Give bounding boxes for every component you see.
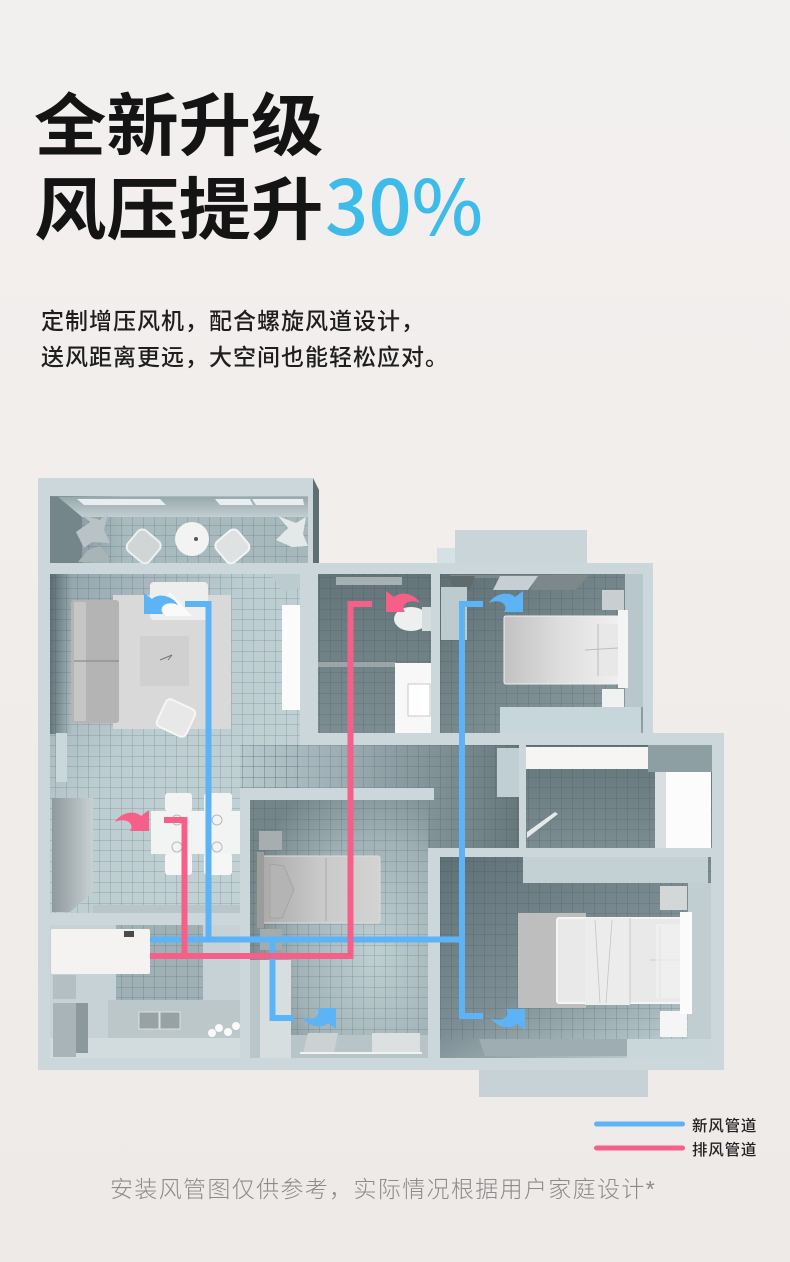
tv unit: [282, 605, 300, 710]
legend: 排风管道: [692, 1140, 757, 1159]
dining table: [151, 793, 240, 875]
room: living and dining: [50, 574, 519, 913]
title: 30%: [325, 147, 483, 257]
legend: 新风管道: [692, 1116, 757, 1135]
toilet: [394, 607, 428, 631]
armchairs: [150, 582, 208, 620]
outer walls: [38, 478, 724, 1097]
arrows: exhaust air: [115, 591, 420, 831]
description text: 送风距离更远，大空间也能轻松应对。: [41, 344, 449, 370]
arrows: fresh air: [144, 591, 525, 1030]
room: kitchen: [50, 925, 240, 1058]
coffee table: [140, 636, 189, 686]
footnote: 安装风管图仅供参考，实际情况根据用户家庭设计*: [110, 1176, 656, 1202]
bed: [504, 616, 619, 684]
title: [34, 88, 483, 257]
room: bedroom north: [440, 574, 643, 733]
bed: [260, 856, 380, 923]
legend: [594, 1116, 757, 1159]
room: balcony: [50, 496, 308, 566]
table and chairs: [175, 522, 209, 556]
description text: 定制增压风机，配合螺旋风道设计，: [41, 308, 425, 334]
plants: [76, 514, 308, 563]
rug: [113, 595, 231, 729]
room: storage: [526, 745, 712, 848]
interior walls: [50, 574, 724, 1058]
sofa: [71, 600, 119, 723]
room: bedroom south-west: [250, 800, 428, 1058]
title: 全新升级: [34, 88, 323, 165]
room: bathroom: [318, 574, 431, 733]
ventilation unit: [51, 929, 150, 974]
title: 风压提升: [34, 172, 323, 249]
room: bedroom south-east: [440, 857, 711, 1058]
nightstands: [259, 831, 282, 850]
bed: [557, 918, 681, 1003]
wardrobe: [250, 960, 291, 1058]
fridge: [52, 798, 93, 912]
shoe racks: [303, 1033, 338, 1053]
rug: [518, 913, 586, 1008]
exhaust air ducts: [150, 604, 372, 956]
vanity: [395, 663, 431, 733]
description text: [41, 308, 449, 370]
fresh air ducts: [150, 604, 483, 1018]
floor plan: [38, 478, 724, 1097]
wardrobe: [500, 707, 641, 733]
